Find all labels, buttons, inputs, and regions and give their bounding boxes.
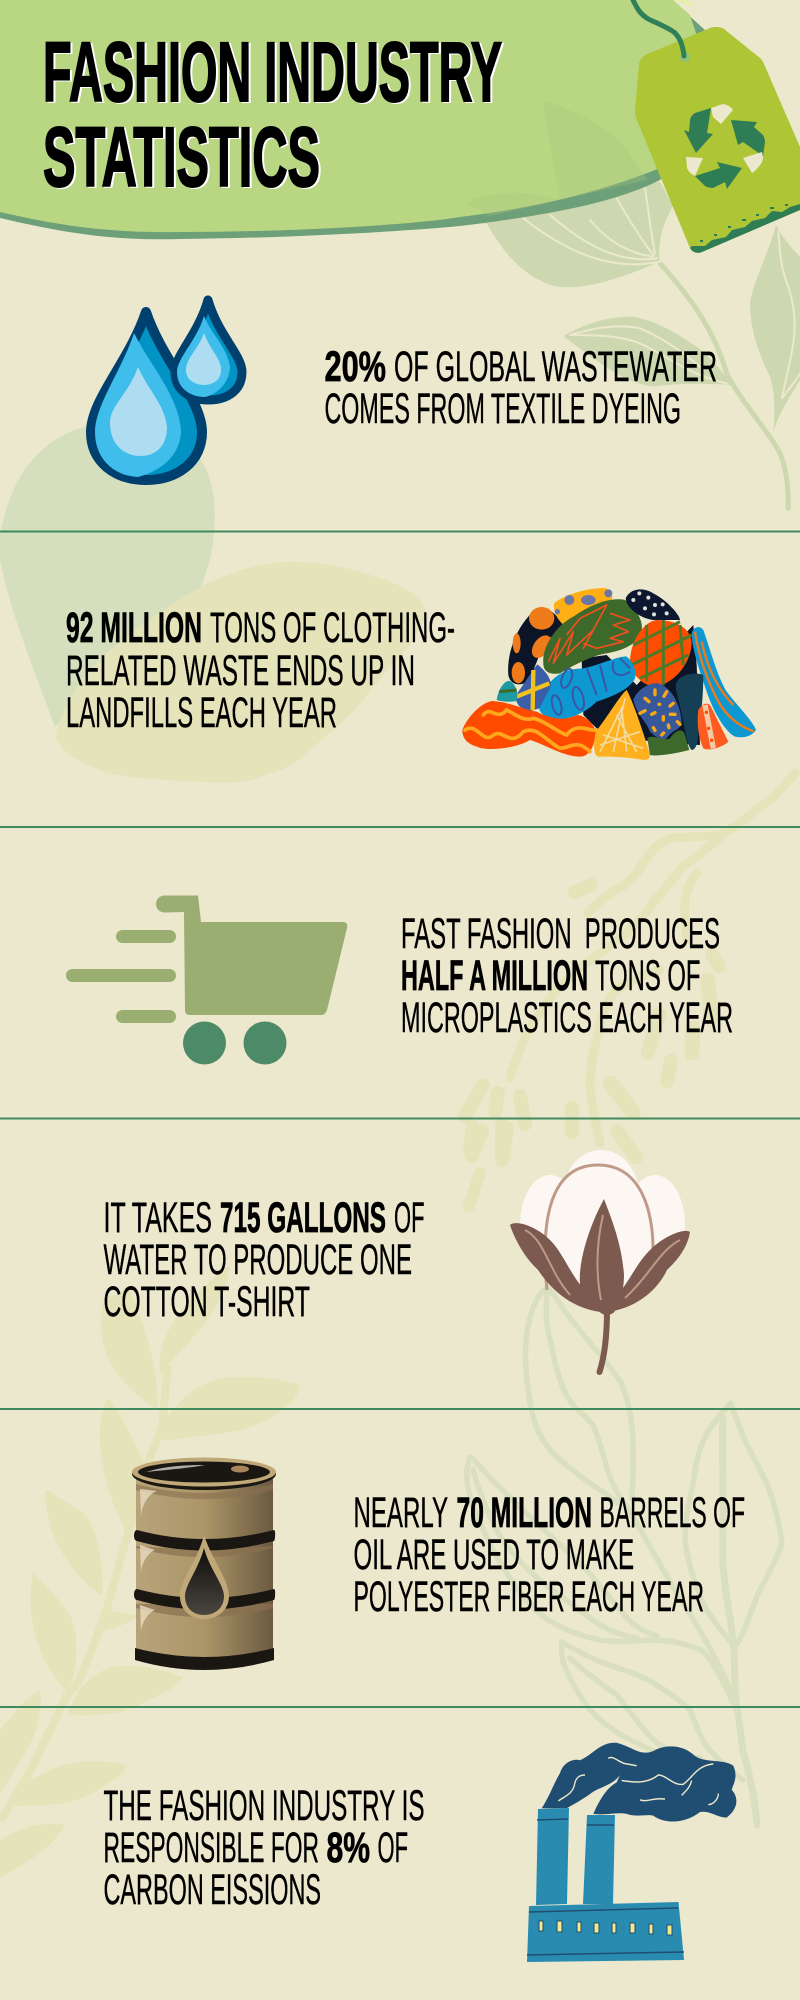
background plant: lower right outline — [467, 1287, 782, 1825]
title: STATISTICS — [45, 111, 322, 205]
background blob: sage — [0, 423, 215, 727]
title — [43, 25, 504, 205]
text: landfill stat: RELATED WASTE ENDS UP IN — [66, 647, 415, 695]
icon: water drops — [91, 300, 242, 480]
icon: cotton flower — [510, 1150, 690, 1372]
text: microplastics stat: HALF A MILLION — [401, 952, 588, 1000]
text: polyester stat — [354, 1489, 745, 1621]
text: gallons stat: IT TAKES — [104, 1194, 212, 1242]
text: wastewater stat: 20% — [324, 343, 386, 391]
text: carbon stat: OF — [378, 1824, 408, 1872]
text: polyester stat: NEARLY — [354, 1489, 448, 1537]
text: wastewater stat — [324, 343, 717, 433]
text: landfill stat: LANDFILLS EACH YEAR — [66, 689, 337, 737]
title: STATISTICS — [43, 110, 320, 204]
text: landfill stat — [66, 604, 455, 737]
faint leaf over header — [467, 100, 647, 216]
text: carbon stat — [104, 1782, 424, 1914]
icon: recycle symbol — [684, 104, 765, 189]
text: gallons stat: 715 GALLONS — [220, 1194, 386, 1242]
text: carbon stat: CARBON EISSIONS — [104, 1866, 321, 1914]
text: gallons stat: COTTON T-SHIRT — [104, 1278, 310, 1326]
text: microplastics stat — [401, 910, 733, 1042]
text: gallons stat — [104, 1194, 424, 1326]
icon: clothing pile — [462, 588, 756, 760]
icon: factory — [527, 1743, 736, 1962]
background plant: top right — [460, 182, 800, 508]
icon: oil barrel — [132, 1458, 276, 1670]
background plant: lower left — [0, 1265, 300, 1877]
text: landfill stat: 92 MILLION — [66, 604, 202, 652]
text: gallons stat: WATER TO PRODUCE ONE — [104, 1236, 412, 1284]
background plant: centre right stems and seeds — [465, 773, 795, 1206]
text: carbon stat: 8% — [326, 1824, 370, 1872]
icon: shopping cart — [66, 896, 347, 1064]
text: microplastics stat: TONS OF — [595, 952, 700, 1000]
text: carbon stat: RESPONSIBLE FOR — [104, 1824, 319, 1872]
text: landfill stat: TONS OF CLOTHING- — [210, 604, 455, 652]
text: polyester stat: 70 MILLION — [456, 1489, 592, 1537]
header banner — [0, 0, 720, 239]
text: carbon stat: THE FASHION INDUSTRY IS — [104, 1782, 424, 1830]
text: gallons stat: OF — [394, 1194, 424, 1242]
dividers — [0, 530, 800, 1708]
icon: recycle tag — [633, 0, 800, 253]
background blob: pale yellow — [56, 562, 426, 783]
